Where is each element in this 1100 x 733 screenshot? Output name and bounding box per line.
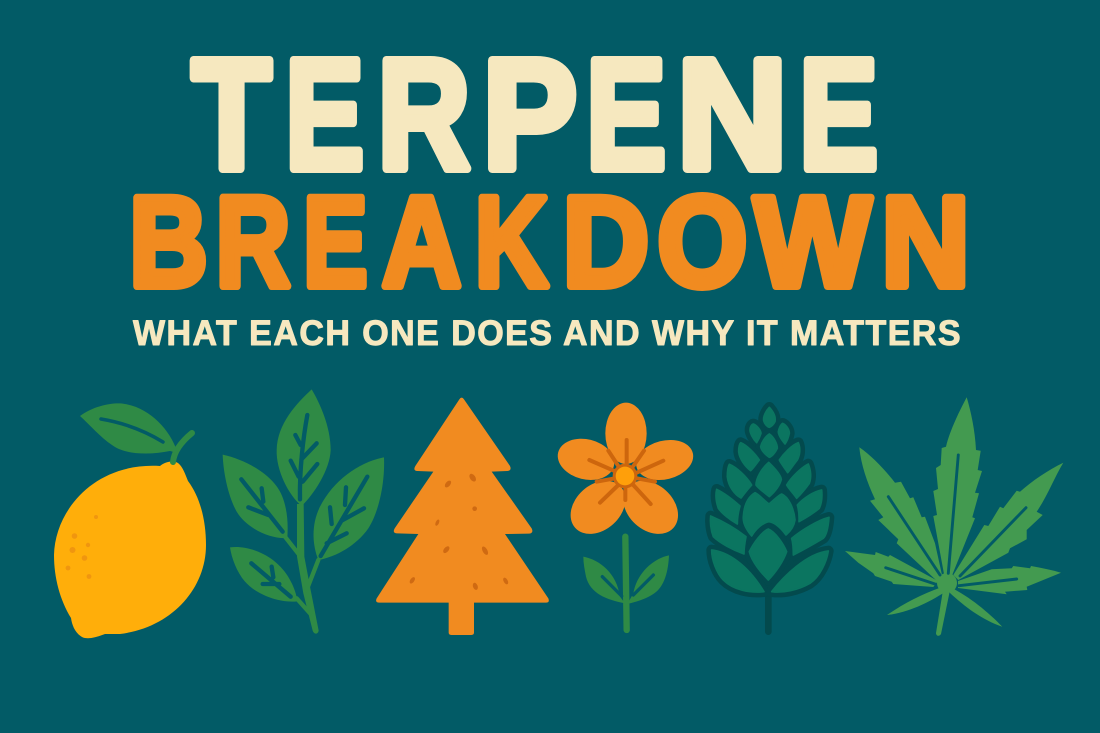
flower leaves bbox=[583, 557, 625, 603]
icon: cannabis leaf bbox=[845, 397, 1063, 636]
title: BREAKDOWN: W bbox=[754, 171, 871, 314]
title: TERPENE: R bbox=[378, 28, 470, 202]
hop outline bbox=[710, 407, 829, 592]
title: BREAKDOWN: E bbox=[303, 171, 368, 314]
tree shape bbox=[376, 398, 549, 635]
lemon body bbox=[54, 462, 206, 638]
tree speckles bbox=[409, 473, 509, 591]
lower right leaflet bbox=[958, 566, 1061, 594]
title: BREAKDOWN: D bbox=[563, 171, 649, 314]
leaf stem bbox=[936, 590, 950, 636]
lemon leaf vein bbox=[101, 419, 163, 442]
title: TERPENE: P bbox=[483, 28, 577, 202]
bottom leaf bbox=[230, 547, 297, 602]
title: TERPENE: E bbox=[586, 28, 666, 202]
flower center bbox=[613, 464, 637, 488]
left leaf bbox=[223, 455, 288, 538]
small left leaflet bbox=[887, 587, 945, 615]
title: BREAKDOWN: O bbox=[657, 171, 747, 314]
leaf veins bbox=[241, 415, 367, 597]
flower stamens bbox=[589, 440, 663, 504]
hop stem bbox=[758, 593, 778, 632]
small right leaflet bbox=[950, 587, 1002, 627]
flower petals bbox=[553, 403, 697, 545]
subtitle: WHAT EACH ONE DOES AND WHY IT MATTERS bbox=[133, 314, 962, 353]
upper right leaflet bbox=[953, 463, 1063, 580]
icon: lemon bbox=[54, 403, 206, 638]
top leaf bbox=[277, 389, 331, 506]
title: TERPENE: E bbox=[799, 28, 878, 202]
title: BREAKDOWN: N bbox=[881, 171, 970, 314]
title: TERPENE: E bbox=[285, 28, 364, 202]
title: BREAKDOWN: R bbox=[216, 171, 290, 314]
hop inner backing bbox=[720, 413, 817, 597]
leaf center bbox=[937, 573, 957, 593]
title: TERPENE: T bbox=[192, 28, 271, 202]
title: BREAKDOWN: A bbox=[382, 171, 461, 314]
icon: pine tree bbox=[376, 398, 549, 635]
leaf veins bbox=[886, 455, 1026, 586]
lower left leaflet bbox=[845, 551, 938, 587]
branch stem bbox=[297, 504, 319, 634]
icon: flower bbox=[553, 403, 697, 630]
title: TERPENE: N bbox=[677, 28, 788, 202]
title: BREAKDOWN: K bbox=[475, 171, 548, 314]
hop scales bbox=[710, 407, 829, 592]
title: BREAKDOWN: B bbox=[129, 171, 208, 314]
flower stem bbox=[625, 537, 627, 630]
upper left leaflet bbox=[859, 447, 942, 582]
center leaflet bbox=[933, 397, 982, 578]
lemon leaf bbox=[80, 403, 177, 453]
lemon pores bbox=[66, 515, 98, 579]
right leaf bbox=[314, 457, 384, 560]
icon: tea branch bbox=[223, 389, 384, 634]
icon: hop cone bbox=[710, 407, 829, 632]
lemon stem bbox=[173, 433, 192, 462]
